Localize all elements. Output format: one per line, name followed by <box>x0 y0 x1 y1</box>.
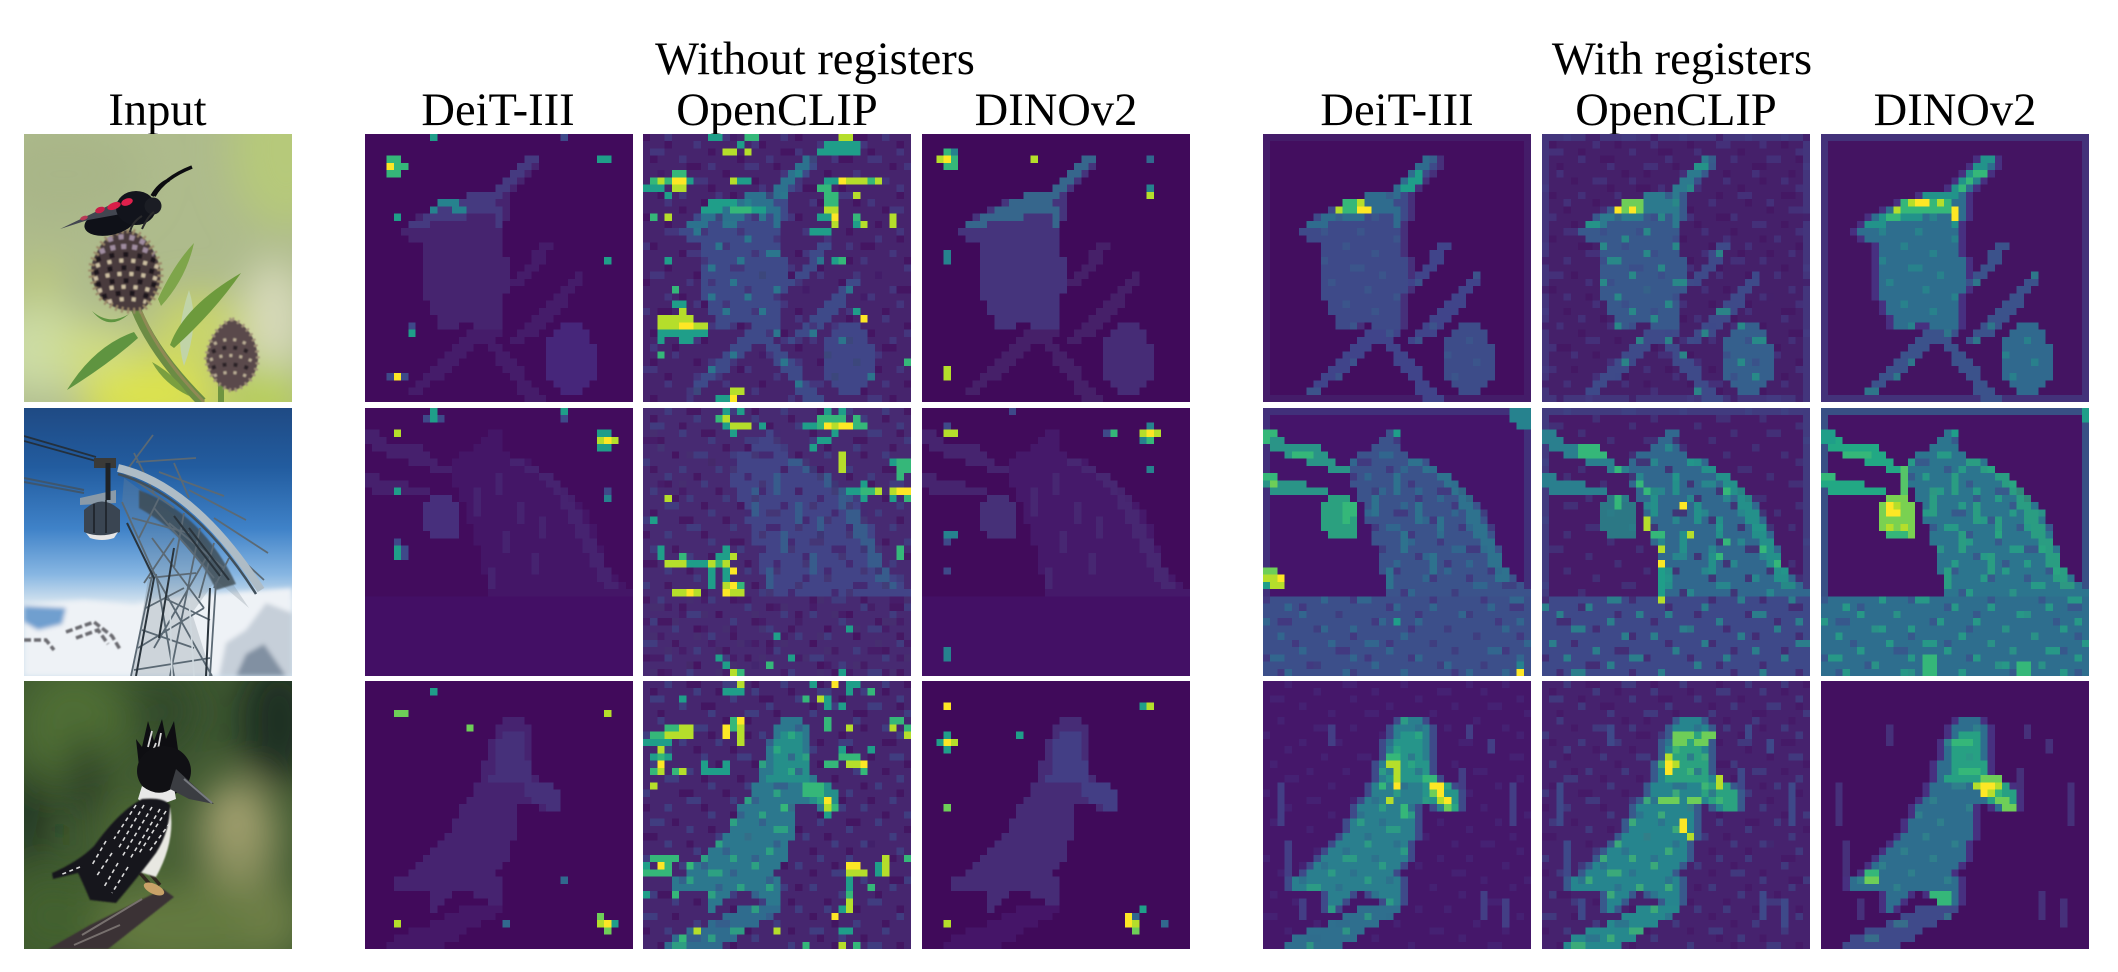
bright regions <box>1821 412 2089 672</box>
outlier activations <box>936 152 1154 377</box>
heatmap row 3: DeiT-III with registers <box>1263 681 1531 949</box>
heatmap row 2: DeiT-III with registers <box>1263 408 1531 676</box>
bright head activations <box>1658 735 1723 837</box>
column heading: OpenCLIP without registers: OpenCLIP <box>676 85 878 136</box>
input photo: crested kingfisher on a branch <box>24 681 292 949</box>
group heading: with registers: With registers <box>1552 34 1812 85</box>
heatmap row 3: DINOv2 without registers <box>922 681 1190 949</box>
outlier activations <box>643 138 911 398</box>
outlier activations <box>394 412 619 556</box>
bright regions <box>1263 412 1531 672</box>
heatmap row 1: DINOv2 without registers <box>922 134 1190 402</box>
outlier activations <box>387 138 611 377</box>
head activations <box>1886 174 1988 217</box>
heatmap row 2: OpenCLIP with registers <box>1542 408 1810 676</box>
outlier activations <box>944 412 1161 658</box>
heatmap row 3: DINOv2 with registers <box>1821 681 2089 949</box>
heatmap row 1: DINOv2 with registers <box>1821 134 2089 402</box>
bright regions <box>1578 448 1781 600</box>
input photo: moth on thistle <box>24 134 292 402</box>
column heading: DINOv2 without registers: DINOv2 <box>975 85 1137 136</box>
heatmap row 3: DeiT-III without registers <box>365 681 633 949</box>
bright head activations <box>1379 757 1451 815</box>
column heading: DeiT-III with registers: DeiT-III <box>1320 85 1474 136</box>
head activations <box>1614 203 1643 210</box>
outlier activations <box>650 412 911 672</box>
bright head activations <box>1864 743 2017 902</box>
outlier activations <box>394 692 619 931</box>
heatmap row 1: OpenCLIP with registers <box>1542 134 1810 402</box>
column heading: DINOv2 with registers: DINOv2 <box>1874 85 2036 136</box>
group heading: without registers: Without registers <box>655 34 975 85</box>
column heading: input: Input <box>108 85 207 136</box>
column heading: DeiT-III without registers: DeiT-III <box>421 85 575 136</box>
heatmap row 2: OpenCLIP without registers <box>643 408 911 676</box>
heatmap row 3: OpenCLIP without registers <box>643 681 911 949</box>
column heading: OpenCLIP with registers: OpenCLIP <box>1575 85 1777 136</box>
heatmap row 1: DeiT-III with registers <box>1263 134 1531 402</box>
heatmap row 1: DeiT-III without registers <box>365 134 633 402</box>
heatmap row 3: OpenCLIP with registers <box>1542 681 1810 949</box>
input photo: cable car pylon over snowy mountains <box>24 408 292 676</box>
heatmap row 2: DINOv2 without registers <box>922 408 1190 676</box>
outlier activations <box>936 706 1168 931</box>
heatmap row 1: OpenCLIP without registers <box>643 134 911 402</box>
outlier activations <box>643 685 911 945</box>
head activations <box>1335 174 1422 210</box>
heatmap row 2: DINOv2 with registers <box>1821 408 2089 676</box>
heatmap row 2: DeiT-III without registers <box>365 408 633 676</box>
